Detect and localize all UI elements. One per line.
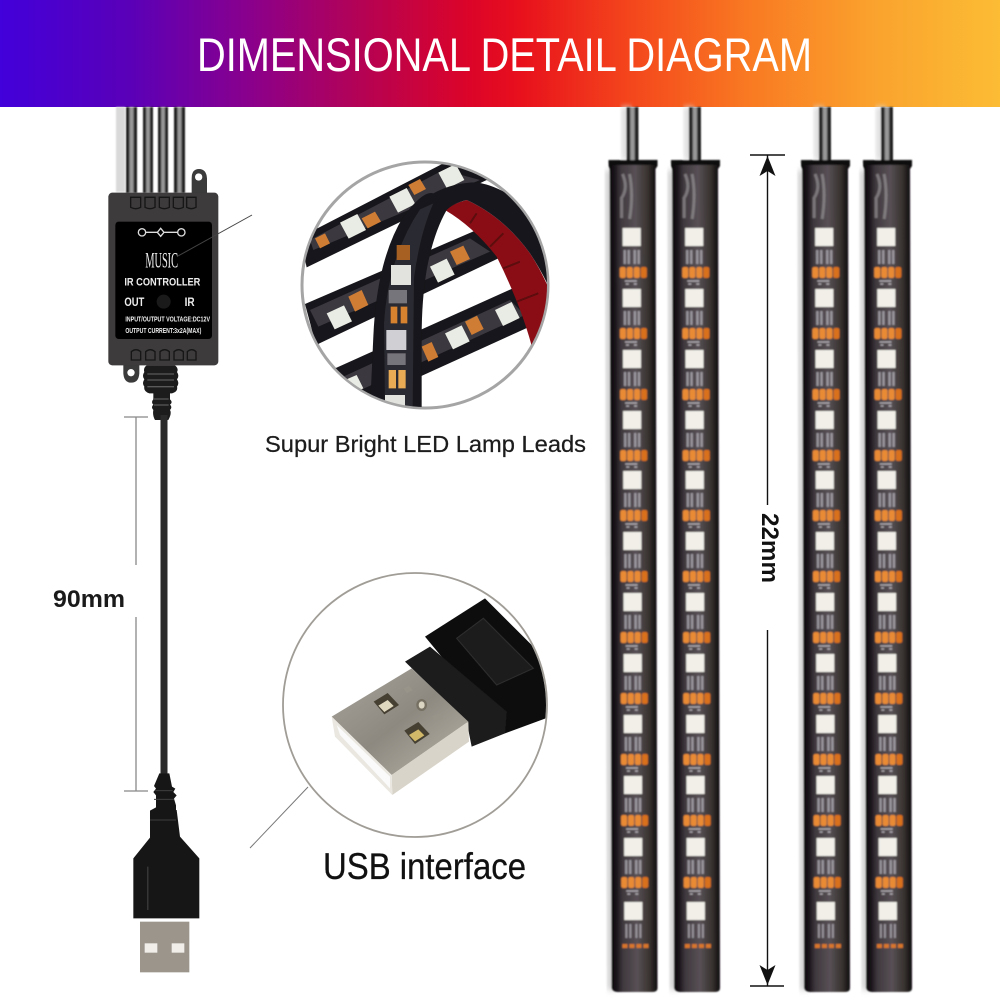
controller label: IR	[185, 295, 195, 309]
controller label: OUT	[124, 295, 145, 309]
header banner	[0, 0, 1000, 107]
controller label: OUTPUT CURRENT:3x2A(MAX)	[125, 328, 201, 335]
background strip C	[336, 289, 526, 394]
detail circle: LED strip	[300, 162, 553, 410]
power symbol	[138, 228, 185, 236]
controller label	[124, 247, 210, 335]
LED bar 2	[668, 107, 722, 992]
controller label: INPUT/OUTPUT VOLTAGE:DC12V	[125, 316, 210, 323]
red adhesive band	[446, 200, 547, 345]
USB black housing	[425, 598, 555, 733]
background strip B	[305, 230, 498, 345]
strain relief	[143, 365, 178, 420]
background strip A	[300, 162, 490, 267]
controller wires	[116, 107, 185, 193]
LED bar 3	[798, 107, 852, 992]
title: DIMENSIONAL DETAIL DIAGRAM	[197, 28, 812, 81]
dimension: 22mm	[750, 155, 785, 986]
dimension: 90mm	[53, 417, 148, 791]
IR controller box	[108, 169, 218, 420]
USB metal shell	[332, 668, 468, 775]
front arched strip	[370, 182, 553, 410]
dimension: 90mm: 90mm	[53, 586, 125, 613]
controller label: IR CONTROLLER	[124, 276, 200, 288]
controller label: MUSIC	[145, 247, 178, 272]
USB plug	[133, 773, 199, 972]
leader line: controller	[178, 215, 252, 256]
USB caption: USB interface	[323, 846, 526, 887]
cable	[160, 415, 168, 790]
dimension: 22mm: 22mm	[756, 513, 783, 583]
detail circle: USB	[283, 573, 555, 837]
LED bar 4	[860, 107, 914, 992]
LED bar 1	[605, 107, 660, 992]
LED strip caption: Supur Bright LED Lamp Leads	[265, 431, 586, 457]
leader line: USB	[250, 787, 308, 848]
